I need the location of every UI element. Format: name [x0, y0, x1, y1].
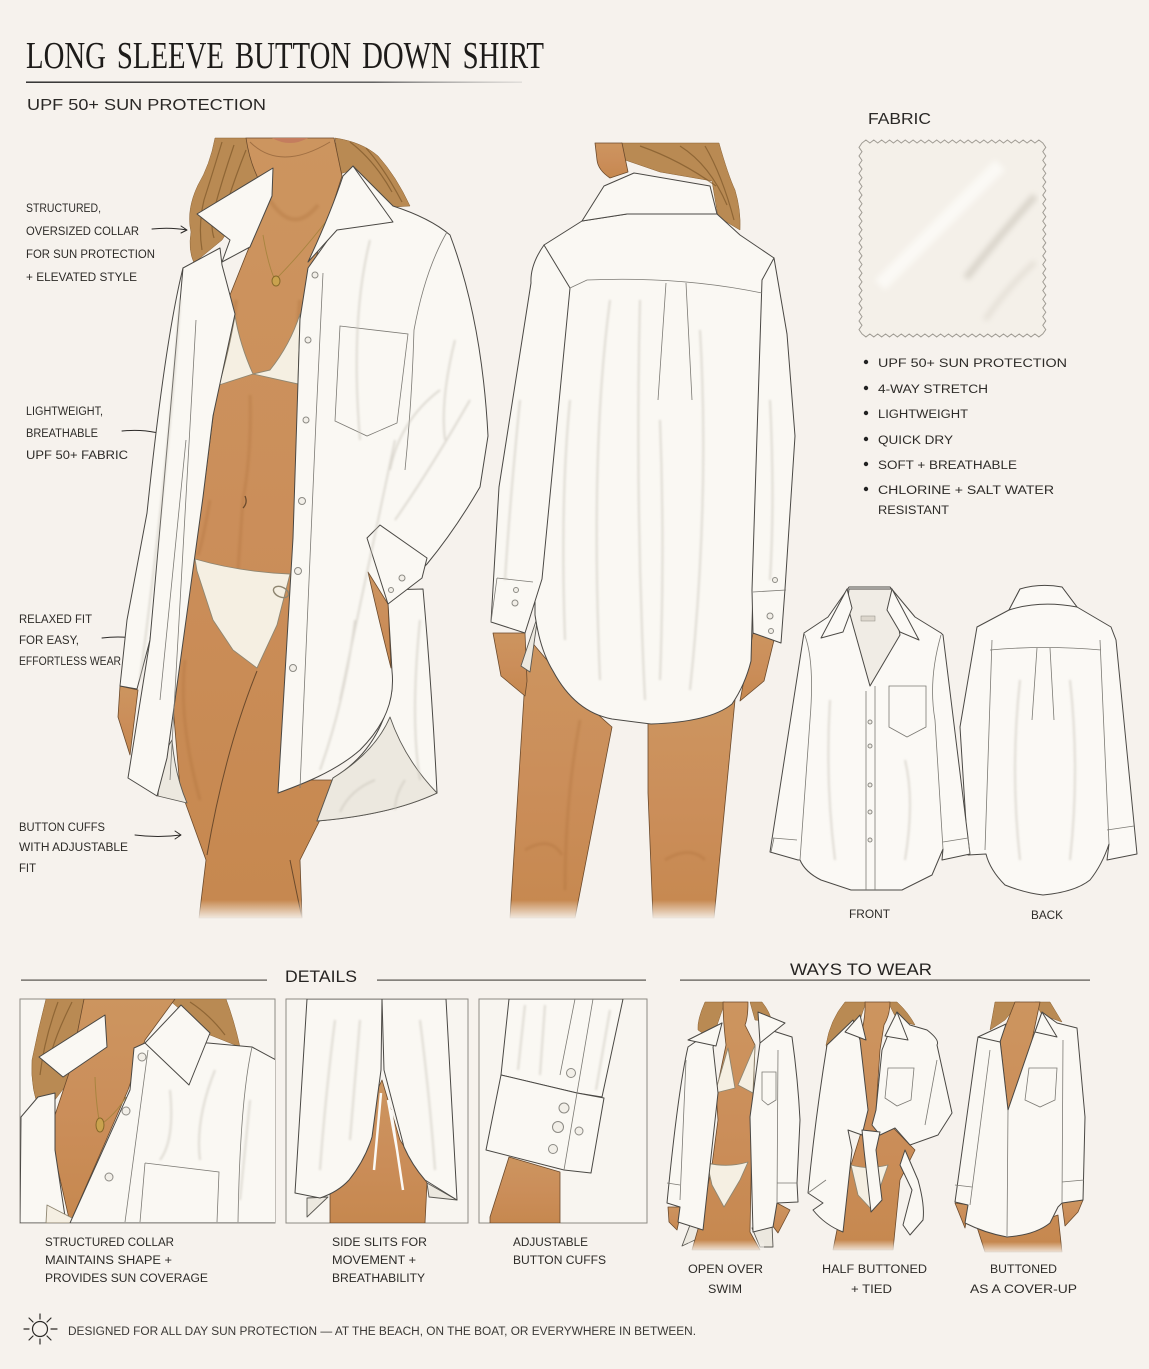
- hair: [698, 1002, 772, 1040]
- bikini bottom: [707, 1162, 748, 1207]
- footer note: DESIGNED FOR ALL DAY SUN PROTECTION — AT THE BEACH, ON THE BOAT, OR EVERYWHERE IN BETWEEN.: [68, 1326, 696, 1338]
- cuff placket: [560, 999, 593, 1170]
- detail caption: collar: PROVIDES SUN COVERAGE: [45, 1273, 208, 1285]
- hair strands: [200, 142, 402, 250]
- bikini bottom: [851, 1165, 888, 1210]
- pocket: [667, 1050, 797, 1203]
- fabric feature list: LIGHTWEIGHT: [878, 409, 968, 421]
- detail skin: [50, 999, 175, 1223]
- detail caption: collar: STRUCTURED COLLAR: [45, 1237, 174, 1249]
- ways to wear heading: WAYS TO WEAR: [790, 960, 932, 979]
- back collar: [1009, 585, 1077, 610]
- collar: [582, 173, 717, 221]
- flat pocket: [889, 686, 926, 737]
- hands: [955, 1200, 1083, 1228]
- detail caption: slit: MOVEMENT +: [332, 1255, 416, 1267]
- bikini top: [715, 1045, 755, 1093]
- back hem shade: [317, 717, 437, 821]
- bikini tie: [272, 584, 290, 600]
- placket and pocket: [955, 1040, 1084, 1236]
- skin: [692, 1002, 760, 1250]
- pocket: [335, 326, 408, 436]
- navel: [243, 496, 246, 508]
- cuff hand: [490, 1157, 560, 1223]
- slit shirt right: [382, 999, 457, 1200]
- neck label: [861, 616, 875, 621]
- left panel: [128, 248, 235, 796]
- pocket: [808, 1060, 937, 1193]
- hand in pocket: [368, 572, 391, 668]
- cuff sleeve: [501, 999, 623, 1097]
- detail left panel: [20, 1093, 66, 1223]
- hands: [668, 1203, 790, 1233]
- buttons: [290, 272, 405, 672]
- right back panel: [317, 589, 437, 821]
- pleat: [658, 283, 692, 400]
- callout: cuffs: [19, 822, 128, 875]
- detail pendant: [96, 1118, 104, 1132]
- slit leg: [330, 1080, 427, 1223]
- flat sketch: front: [770, 587, 970, 890]
- way caption: buttoned: AS A COVER-UP: [970, 1284, 1077, 1296]
- yoke: [570, 279, 762, 293]
- collars: [688, 1012, 785, 1046]
- front collar: [821, 589, 919, 640]
- way to wear: half buttoned tied: [808, 1002, 952, 1252]
- callout: fit: EFFORTLESS WEAR: [19, 656, 121, 668]
- detail panel: side slit: [286, 999, 468, 1223]
- left hand: [493, 633, 527, 696]
- side tail: [521, 615, 538, 672]
- shirt left: [808, 1020, 868, 1232]
- back model illustration: [491, 143, 795, 920]
- detail caption: slit: SIDE SLITS FOR: [332, 1237, 427, 1249]
- inner neck: [847, 589, 900, 686]
- detail caption: cuff: ADJUSTABLE: [513, 1237, 588, 1249]
- neck: [595, 143, 628, 178]
- hair: [990, 1002, 1062, 1030]
- leg fade: [190, 900, 315, 920]
- subtitle: UPF 50+ SUN PROTECTION: [27, 97, 266, 114]
- collars: [978, 1012, 1057, 1042]
- wrinkles: [140, 240, 470, 812]
- way caption: open over swim: SWIM: [708, 1284, 742, 1296]
- cuff: [367, 525, 427, 604]
- flat wrinkles: [828, 700, 910, 860]
- back wrinkles: [1015, 680, 1075, 860]
- back tails: [682, 1225, 773, 1247]
- cuff wrinkles: [518, 1005, 610, 1090]
- leg fade: [830, 1240, 900, 1252]
- callout: fit: RELAXED FIT: [19, 614, 92, 626]
- way caption: buttoned: [970, 1264, 1077, 1296]
- body skin: [173, 138, 342, 918]
- shirt right: [872, 1012, 952, 1145]
- abdomen shading: [183, 395, 250, 800]
- left collar: [197, 168, 273, 262]
- shirt: [955, 1012, 1085, 1237]
- placket line: [300, 273, 323, 788]
- callout: fit: [19, 614, 121, 668]
- fabric feature list: [864, 358, 1067, 517]
- left sleeve: [491, 245, 570, 633]
- detail necklace: [95, 1077, 126, 1125]
- title underline: [26, 82, 522, 83]
- detail wrinkles: [160, 1070, 250, 1200]
- front seams: [771, 633, 970, 890]
- detail caption: cuff: BUTTON CUFFS: [513, 1255, 606, 1267]
- slit tails: [307, 1183, 457, 1217]
- bikini top: [219, 314, 300, 385]
- lips: [272, 138, 308, 143]
- callout: cuffs: FIT: [19, 863, 36, 875]
- callout: collar: + ELEVATED STYLE: [26, 272, 137, 284]
- chin: [250, 142, 330, 157]
- right side: [750, 1030, 800, 1232]
- slit strings: [374, 1093, 403, 1190]
- way caption: half buttoned: + TIED: [851, 1284, 892, 1296]
- detail strands: [40, 1002, 225, 1075]
- way caption: open over swim: [688, 1264, 763, 1296]
- fabric feature list: RESISTANT: [878, 505, 949, 517]
- way caption: half buttoned: HALF BUTTONED: [822, 1264, 927, 1276]
- skin: [833, 1002, 915, 1250]
- flat sketch: back: [960, 585, 1137, 895]
- slit wrinkles: [320, 1020, 435, 1170]
- way caption: buttoned: BUTTONED: [990, 1264, 1057, 1276]
- right sleeve: [752, 258, 795, 643]
- callout: collar: STRUCTURED,: [26, 203, 101, 215]
- fabric heading: FABRIC: [868, 111, 931, 128]
- callout: fabric: LIGHTWEIGHT,: [26, 406, 103, 418]
- callout: cuffs: BUTTON CUFFS: [19, 822, 105, 834]
- fabric feature list: SOFT + BREATHABLE: [878, 460, 1017, 472]
- hair: [826, 1002, 915, 1068]
- flat label: front: FRONT: [849, 909, 890, 921]
- pendant: [272, 276, 280, 286]
- armhole seam: [405, 232, 447, 470]
- detail caption: slit: BREATHABILITY: [332, 1273, 425, 1285]
- left back hem: [158, 740, 187, 803]
- hair: [190, 138, 410, 263]
- front model illustration: [118, 138, 488, 920]
- swatch folds: [880, 165, 1035, 320]
- fabric feature list: UPF 50+ SUN PROTECTION: [878, 358, 1067, 370]
- callout: fabric: [26, 406, 128, 462]
- icon: sun: [24, 1314, 57, 1344]
- right hand: [740, 633, 774, 701]
- fabric feature list: CHLORINE + SALT WATER: [878, 485, 1054, 497]
- leg fade: [688, 1240, 764, 1252]
- left side: [667, 1023, 722, 1230]
- way caption: half buttoned: [822, 1264, 927, 1296]
- detail caption: cuff: [513, 1237, 606, 1267]
- callout: cuffs: WITH ADJUSTABLE: [19, 842, 128, 854]
- callout: collar: FOR SUN PROTECTION: [26, 249, 155, 261]
- thigh line: [207, 671, 257, 855]
- cuff buttons: [512, 578, 778, 634]
- left sleeve: [120, 268, 190, 689]
- bikini bottom: [195, 559, 290, 668]
- neck and chest shading: [222, 190, 318, 380]
- detail hair: [32, 999, 240, 1100]
- detail caption: collar: MAINTAINS SHAPE +: [45, 1255, 172, 1267]
- title: LONG SLEEVE BUTTON DOWN SHIRT: [26, 35, 544, 77]
- hair: [621, 143, 740, 230]
- detail caption: slit: [332, 1237, 427, 1285]
- way to wear: open over swim: [667, 1002, 800, 1252]
- detail seams: [125, 1047, 252, 1222]
- right collar: [308, 166, 393, 262]
- leg fade: [980, 1242, 1065, 1254]
- detail panel: cuff: [479, 999, 647, 1223]
- cuff band: [486, 1075, 604, 1173]
- right cuff: [753, 590, 786, 592]
- detail right panel: [70, 1043, 276, 1223]
- callout: fabric: UPF 50+ FABRIC: [26, 450, 128, 462]
- left hand: [118, 686, 138, 755]
- callout: fit: FOR EASY,: [19, 635, 79, 647]
- tie: [862, 1130, 882, 1212]
- details heading: DETAILS: [285, 967, 357, 986]
- collars: [845, 1012, 908, 1040]
- right leg: [648, 700, 735, 918]
- shirt body: [535, 214, 774, 724]
- fabric swatch: [859, 140, 1046, 337]
- left cuff: [491, 578, 533, 622]
- flat label: back: BACK: [1031, 910, 1063, 922]
- arrow: cuffs: [135, 831, 181, 839]
- cuff buttons: [548, 1068, 583, 1154]
- detail right collar: [145, 1005, 210, 1085]
- right panel and sleeve: [278, 166, 488, 793]
- slit shirt left: [295, 999, 382, 1198]
- left leg: [510, 640, 612, 918]
- detail caption: collar: [45, 1237, 208, 1285]
- skin: [977, 1002, 1062, 1252]
- callout: collar: [26, 203, 155, 284]
- hair strands: [640, 146, 734, 220]
- detail buttons: [105, 1053, 146, 1181]
- back seams: [985, 640, 1134, 850]
- callout: fabric: BREATHABLE: [26, 428, 98, 440]
- left placket: [160, 320, 196, 780]
- way to wear: buttoned: [955, 1002, 1085, 1254]
- way caption: open over swim: OPEN OVER: [688, 1264, 763, 1276]
- detail panel: collar: [20, 999, 276, 1223]
- necklace: [263, 219, 328, 280]
- right tail: [900, 1150, 923, 1235]
- flat buttons: [868, 720, 872, 842]
- arrow: fit: [102, 634, 134, 641]
- callout: collar: OVERSIZED COLLAR: [26, 226, 139, 238]
- detail left collar: [39, 1015, 107, 1077]
- fabric feature list: 4-WAY STRETCH: [878, 384, 988, 396]
- fabric feature list: QUICK DRY: [878, 435, 953, 447]
- leg fade: [505, 900, 720, 920]
- detail bikini: [46, 1204, 72, 1223]
- wrinkles: [505, 300, 772, 700]
- leg shading: [525, 720, 705, 890]
- arrow: fabric: [122, 430, 175, 439]
- arrow: collar: [152, 226, 187, 233]
